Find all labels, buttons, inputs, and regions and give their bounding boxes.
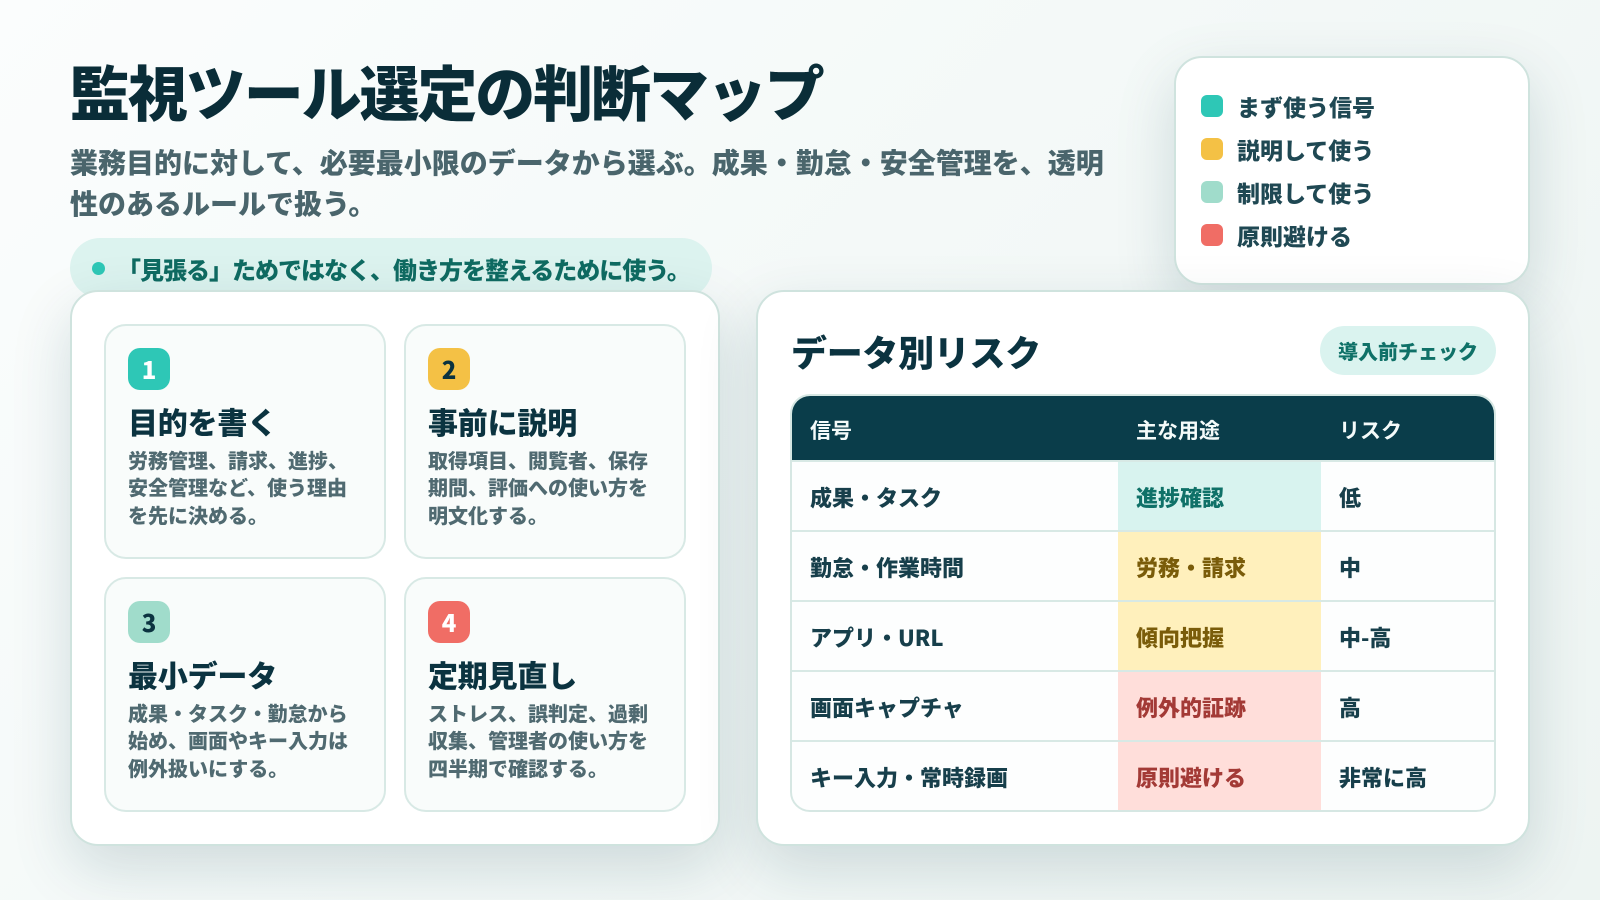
- legend label: explain: 説明して使う: [1237, 132, 1374, 166]
- step 4 text: 収集、管理者の使い方を: [428, 725, 648, 754]
- panel: steps: [70, 290, 720, 846]
- step 1 text: 労務管理、請求、進捗、: [128, 445, 348, 474]
- legend swatch: avoid: [1201, 224, 1223, 246]
- use cell: avoid: [1118, 742, 1321, 810]
- legend swatch: first signal: [1201, 95, 1223, 117]
- row line 2: [792, 530, 1494, 532]
- step 3 text: 例外扱いにする。: [128, 753, 288, 782]
- step 3 text: 始め、画面やキー入力は: [128, 725, 348, 754]
- step 4 heading: 定期見直し: [428, 652, 577, 696]
- row 5 risk: 非常に高: [1339, 761, 1427, 793]
- badge 3: 3: [142, 604, 156, 639]
- step 4 text: 四半期で確認する。: [428, 753, 608, 782]
- row 2 risk: 中: [1339, 551, 1361, 583]
- panel: legend: [1174, 56, 1530, 285]
- subtitle: 業務目的に対して、必要最小限のデータから選ぶ。成果・勤怠・安全管理を、透明: [70, 142, 1104, 182]
- row 4 use: 例外的証跡: [1136, 691, 1246, 723]
- step 3 text: [128, 698, 348, 782]
- use cell: progress: [1118, 462, 1321, 530]
- callout text: 「見張る」ためではなく、働き方を整えるために使う。: [117, 251, 690, 286]
- row 4 signal: 画面キャプチャ: [810, 691, 964, 723]
- badge 2: [428, 348, 470, 390]
- step card 1: [104, 324, 386, 559]
- callout pill: [70, 238, 712, 298]
- badge 4: 4: [442, 604, 456, 639]
- row 4 risk: 高: [1339, 691, 1361, 723]
- badge 3: [128, 601, 170, 643]
- legend label: avoid: 原則避ける: [1237, 218, 1352, 252]
- header: use: 主な用途: [1136, 415, 1220, 445]
- legend label: first signal: まず使う信号: [1237, 89, 1375, 123]
- legend label: restrict: 制限して使う: [1237, 175, 1374, 209]
- step 3 heading: 最小データ: [128, 652, 277, 696]
- step 1 text: を先に決める。: [128, 500, 268, 529]
- use cell: trend: [1118, 602, 1321, 670]
- badge 4: [428, 601, 470, 643]
- row 5 use: 原則避ける: [1136, 761, 1246, 793]
- step 4 text: [428, 698, 648, 782]
- step 1 heading: 目的を書く: [128, 399, 277, 443]
- row line 3: [792, 600, 1494, 602]
- step 1 text: [128, 445, 348, 529]
- badge 2: 2: [442, 351, 456, 386]
- step 2 heading: 事前に説明: [428, 399, 577, 443]
- header: risk: リスク: [1339, 415, 1402, 445]
- row 5 signal: キー入力・常時録画: [810, 761, 1008, 793]
- row line 1: [792, 460, 1494, 462]
- step 3 text: 成果・タスク・勤怠から: [128, 698, 348, 727]
- row 2 signal: 勤怠・作業時間: [810, 551, 964, 583]
- header: signal: 信号: [810, 415, 852, 445]
- chip: [1320, 326, 1496, 375]
- legend swatch: explain: [1201, 138, 1223, 160]
- step card 2: [404, 324, 686, 559]
- badge 1: [128, 348, 170, 390]
- subtitle: 性のあるルールで扱う。: [70, 183, 376, 223]
- chip: 導入前チェック: [1338, 336, 1478, 365]
- row 3 risk: 中-高: [1339, 621, 1391, 653]
- use cell: labor: [1118, 532, 1321, 600]
- row line 4: [792, 670, 1494, 672]
- row 3 use: 傾向把握: [1136, 621, 1224, 653]
- panel: risk table: [756, 290, 1530, 846]
- step 1 text: 安全管理など、使う理由: [128, 472, 347, 501]
- table header row: [792, 396, 1494, 460]
- callout dot: [92, 262, 105, 275]
- table heading: データ別リスク: [791, 325, 1041, 377]
- row 2 use: 労務・請求: [1136, 551, 1246, 583]
- title: 監視ツール選定の判断マップ: [70, 47, 823, 134]
- step 2 text: 期間、評価への使い方を: [428, 472, 648, 501]
- row 3 signal: アプリ・URL: [810, 621, 944, 653]
- step card 3: [104, 577, 386, 812]
- row 1 signal: 成果・タスク: [810, 481, 942, 513]
- step 4 text: ストレス、誤判定、過剰: [428, 698, 648, 727]
- row 1 use: 進捗確認: [1136, 481, 1224, 513]
- step 2 text: 明文化する。: [428, 500, 548, 529]
- badge 1: 1: [142, 351, 156, 386]
- step card 4: [404, 577, 686, 812]
- step 2 text: [428, 445, 648, 529]
- subtitle: [70, 142, 1104, 223]
- legend swatch: restrict: [1201, 181, 1223, 203]
- step 2 text: 取得項目、閲覧者、保存: [428, 445, 648, 474]
- row 1 risk: 低: [1339, 481, 1361, 513]
- use cell: exception: [1118, 672, 1321, 740]
- risk table: [790, 394, 1496, 812]
- row line 5: [792, 740, 1494, 742]
